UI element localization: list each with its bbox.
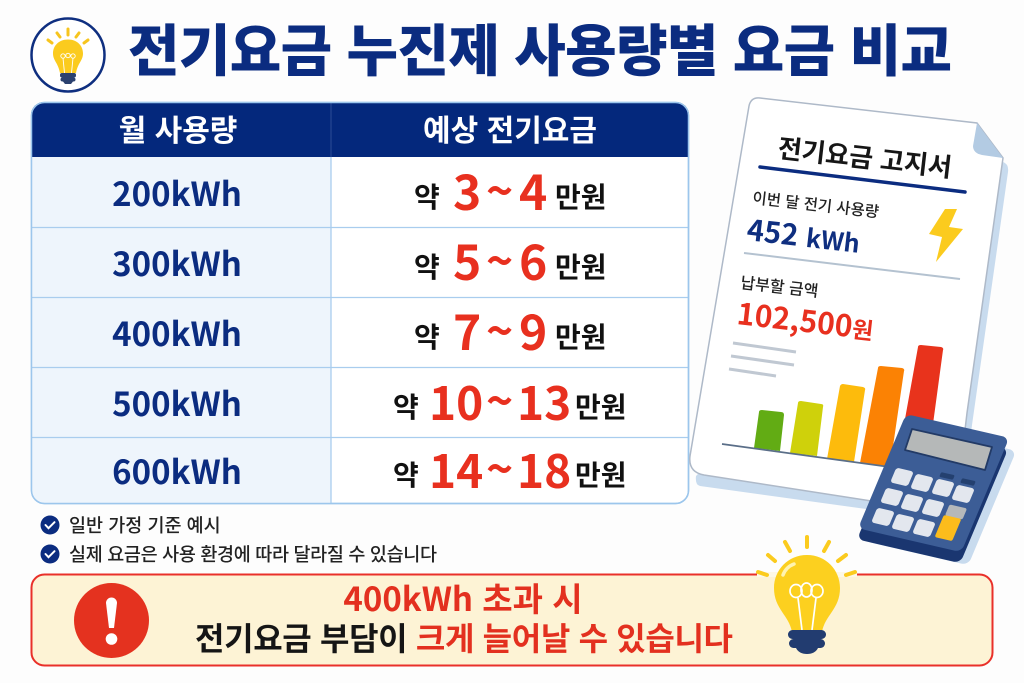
row: 400kWh: 400kWh <box>112 308 242 356</box>
paper shadow <box>696 162 1008 522</box>
usage value: 452 kWh <box>745 207 862 262</box>
row: 500kWh: 약 <box>393 386 419 426</box>
header label: monthly usage: 월 사용량 <box>119 106 237 150</box>
note 2: 실제 요금은 사용 환경에 따라 달라질 수 있습니다 <box>69 541 437 567</box>
row: 400kWh: 9 <box>519 294 547 364</box>
row: 400kWh: 만원 <box>555 316 607 356</box>
row: 600kWh <box>112 434 627 502</box>
row: 600kWh: ~ <box>486 434 513 500</box>
row: 200kWh: 약 <box>414 176 440 216</box>
page fold <box>973 123 1003 158</box>
row: 600kWh: 18 <box>517 436 571 502</box>
bar chart <box>722 345 943 467</box>
row: 300kWh <box>112 224 607 294</box>
row: 400kWh <box>112 294 607 364</box>
callout line 2: 전기요금 부담이 크게 늘어날 수 있습니다 <box>195 614 733 660</box>
row: 600kWh: 600kWh <box>112 446 242 494</box>
row: 600kWh: 만원 <box>575 454 627 494</box>
row: 400kWh: 약 <box>414 316 440 356</box>
amount value: 102,500원 <box>735 289 876 348</box>
text lines <box>729 343 796 376</box>
row: 200kWh: 200kWh <box>112 168 242 216</box>
row: 500kWh <box>112 366 627 434</box>
icon: large light bulb <box>757 537 857 654</box>
amount label: 납부할 금액 <box>739 269 820 302</box>
row: 200kWh <box>112 154 607 224</box>
invoice title: 전기요금 고지서 <box>776 128 954 185</box>
row: 500kWh: 13 <box>517 368 571 434</box>
row: 300kWh: 300kWh <box>112 238 242 286</box>
note 1: 일반 가정 기준 예시 <box>69 512 221 538</box>
panel: pricing table <box>31 102 689 504</box>
icon: calculator <box>857 414 1016 565</box>
row: 600kWh: 14 <box>429 436 483 502</box>
row: 300kWh: 5 <box>453 224 481 294</box>
row: 600kWh: 약 <box>393 454 419 494</box>
row: 400kWh: ~ <box>486 296 513 362</box>
usage label: 이번 달 전기 사용량 <box>751 186 880 222</box>
row: 200kWh: ~ <box>486 156 513 222</box>
callout line 1: 400kWh 초과 시 <box>343 573 583 621</box>
first column background <box>32 157 331 503</box>
calculator display <box>905 429 992 470</box>
icon: lightning bolt <box>929 209 963 262</box>
row: 200kWh: 3 <box>453 154 481 224</box>
callout: warning banner <box>32 573 992 666</box>
row: 200kWh: 만원 <box>555 176 607 216</box>
row: 300kWh: 약 <box>414 246 440 286</box>
table header <box>31 102 689 157</box>
title: 전기요금 누진제 사용량별 요금 비교 <box>128 7 952 88</box>
row: 200kWh: 4 <box>519 154 547 224</box>
icon: title light bulb badge <box>32 18 104 92</box>
row: 500kWh: 10 <box>429 368 483 434</box>
paper <box>690 98 1003 514</box>
row: 300kWh: ~ <box>486 226 513 292</box>
row: 300kWh: 만원 <box>555 246 607 286</box>
row: 300kWh: 6 <box>519 224 547 294</box>
icon: exclamation <box>74 583 149 658</box>
row: 500kWh: 500kWh <box>112 378 242 426</box>
row: 400kWh: 7 <box>453 294 481 364</box>
row: 500kWh: ~ <box>486 366 513 432</box>
row: 500kWh: 만원 <box>575 386 627 426</box>
calculator keys <box>871 468 975 537</box>
panel: invoice document <box>690 98 1008 522</box>
header label: estimated fee: 예상 전기요금 <box>423 106 597 150</box>
